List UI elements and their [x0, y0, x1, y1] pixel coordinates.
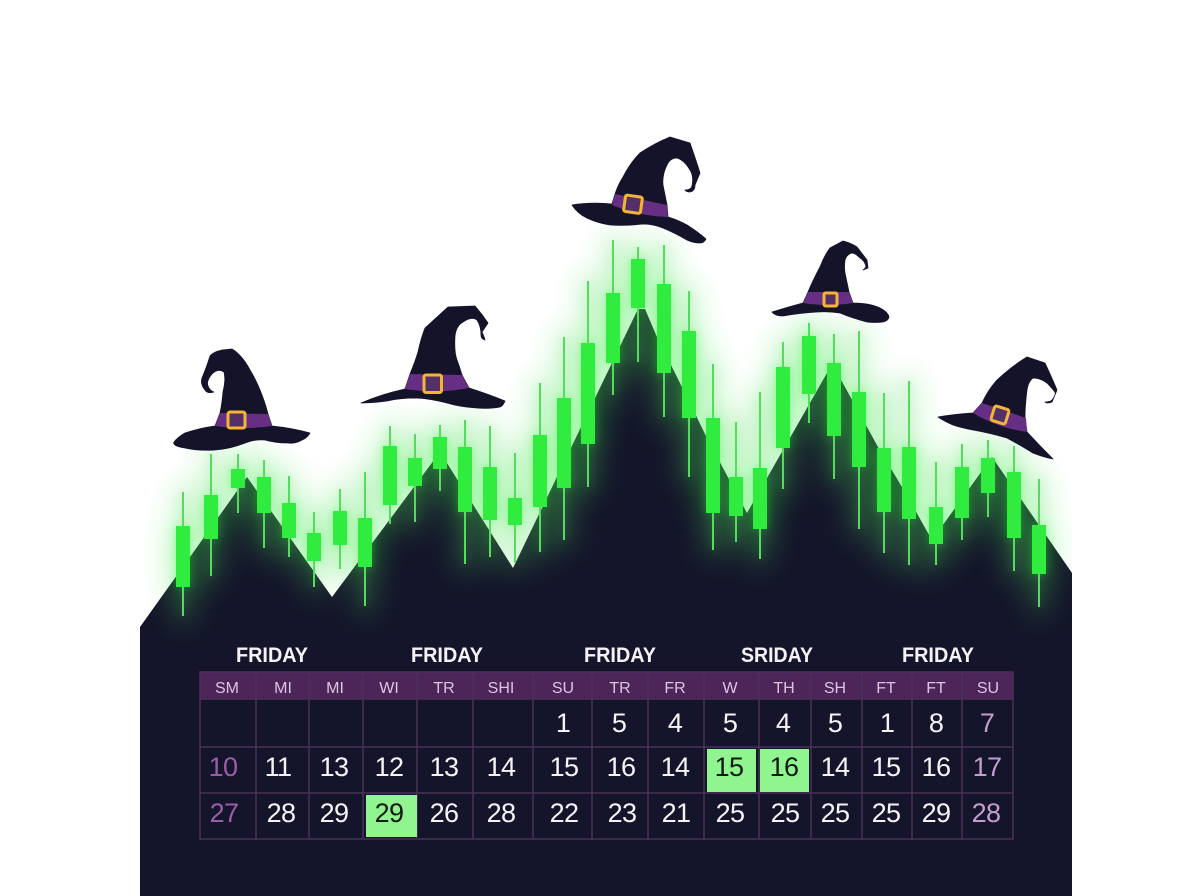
date numbers — [209, 708, 1001, 828]
date numbers: 12 — [375, 752, 403, 782]
date numbers: 4 — [776, 708, 791, 738]
icon: witch hat 2 — [361, 306, 505, 408]
date numbers: 15 — [715, 752, 743, 782]
date numbers: 1 — [880, 708, 894, 738]
icon: witch hat 3 — [572, 137, 706, 243]
calendar — [200, 644, 1013, 839]
month titles: SRIDAY — [741, 644, 813, 667]
date numbers: 8 — [929, 708, 943, 738]
date numbers: 15 — [550, 752, 578, 782]
date numbers: 7 — [980, 708, 994, 738]
date numbers: 23 — [608, 798, 636, 828]
date numbers: 21 — [662, 798, 690, 828]
weekday labels: TR — [609, 680, 631, 697]
date numbers: 16 — [770, 752, 798, 782]
date numbers: 13 — [320, 752, 348, 782]
icon: witch hat 5 — [938, 357, 1057, 459]
date numbers: 5 — [612, 708, 626, 738]
date numbers: 25 — [872, 798, 900, 828]
calendar grid — [200, 672, 1013, 839]
weekday labels: SU — [552, 680, 574, 697]
weekday labels: FT — [876, 680, 896, 697]
date numbers: 10 — [209, 752, 237, 782]
month titles: FRIDAY — [902, 644, 974, 667]
date numbers: 26 — [430, 798, 458, 828]
month titles: FRIDAY — [236, 644, 308, 667]
date numbers: 11 — [265, 752, 291, 782]
candlestick glow — [176, 240, 1046, 616]
date numbers: 25 — [716, 798, 744, 828]
date numbers: 5 — [828, 708, 842, 738]
date numbers: 28 — [972, 798, 1000, 828]
candlestick chart — [176, 240, 1046, 616]
date numbers: 13 — [430, 752, 458, 782]
date numbers: 14 — [821, 752, 850, 782]
date numbers: 15 — [872, 752, 900, 782]
weekday labels: W — [722, 680, 738, 697]
date numbers: 17 — [973, 752, 1001, 782]
weekday header band — [200, 672, 1013, 699]
date numbers: 4 — [668, 708, 683, 738]
date numbers: 14 — [487, 752, 516, 782]
highlighted dates — [366, 749, 809, 837]
date numbers: 22 — [550, 798, 578, 828]
date numbers: 28 — [267, 798, 295, 828]
date numbers: 25 — [821, 798, 849, 828]
weekday labels: WI — [379, 680, 399, 697]
weekday labels: MI — [326, 680, 344, 697]
date numbers: 14 — [661, 752, 690, 782]
weekday labels: FR — [664, 680, 686, 697]
date numbers: 29 — [320, 798, 348, 828]
weekday labels: SM — [215, 680, 239, 697]
weekday labels: TR — [433, 680, 455, 697]
icon: witch hat 1 — [174, 349, 310, 450]
date numbers: 5 — [723, 708, 737, 738]
date numbers: 16 — [607, 752, 635, 782]
weekday labels: SHI — [488, 680, 514, 697]
date numbers: 16 — [922, 752, 950, 782]
weekday labels: SU — [977, 680, 999, 697]
month titles: FRIDAY — [411, 644, 483, 667]
month titles: FRIDAY — [584, 644, 656, 667]
date numbers: 29 — [375, 798, 403, 828]
weekday labels: MI — [274, 680, 292, 697]
weekday labels: FT — [926, 680, 946, 697]
weekday labels: SH — [824, 680, 846, 697]
date numbers: 28 — [487, 798, 515, 828]
date numbers: 25 — [771, 798, 799, 828]
mountain silhouette — [140, 309, 1072, 896]
date numbers: 1 — [556, 708, 570, 738]
month titles — [236, 644, 974, 667]
weekday labels: TH — [773, 680, 795, 697]
weekday labels — [215, 680, 999, 697]
date numbers: 29 — [922, 798, 950, 828]
date numbers: 27 — [210, 798, 238, 828]
icon: witch hat 4 — [772, 241, 889, 322]
